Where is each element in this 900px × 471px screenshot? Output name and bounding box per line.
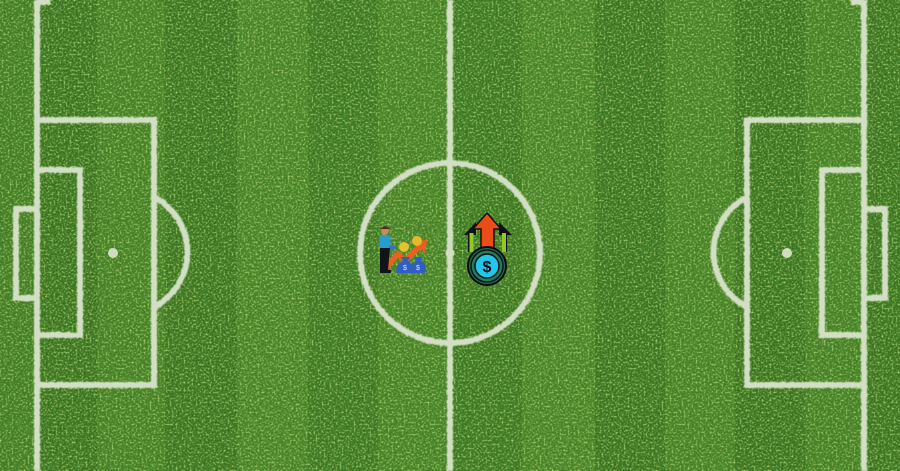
central orange arrow (473, 213, 501, 249)
right side arrow (499, 222, 512, 252)
right penalty area (747, 120, 864, 385)
right touchline (861, 0, 867, 471)
icon: investor with money bags (380, 226, 427, 273)
right penalty arc (714, 197, 747, 307)
right goal (864, 209, 885, 298)
left touchline (34, 0, 40, 471)
left penalty arc (154, 197, 187, 307)
left side arrow (464, 222, 476, 252)
right green bar (502, 233, 506, 252)
left goal area (37, 170, 80, 335)
icon: dollar coin with rising arrows (464, 213, 512, 285)
left green bar (470, 233, 474, 252)
top left corner mark (37, 0, 50, 5)
person (380, 226, 395, 273)
icon: dollar coin with rising arrows: $ (483, 259, 492, 276)
money bags (396, 257, 413, 273)
halfway line (447, 0, 453, 471)
coins (399, 242, 409, 252)
right goal area (822, 170, 864, 335)
right penalty spot (782, 248, 792, 258)
top right corner mark (851, 0, 864, 5)
left penalty spot (108, 248, 118, 258)
centre spot (446, 248, 454, 258)
left penalty area (37, 120, 154, 385)
growth arrow (383, 246, 420, 271)
left goal (16, 209, 37, 298)
icon: investor with money bags: $ (403, 265, 407, 272)
coin (468, 247, 506, 285)
icon: investor with money bags: $ (416, 265, 420, 272)
centre circle (360, 163, 540, 343)
